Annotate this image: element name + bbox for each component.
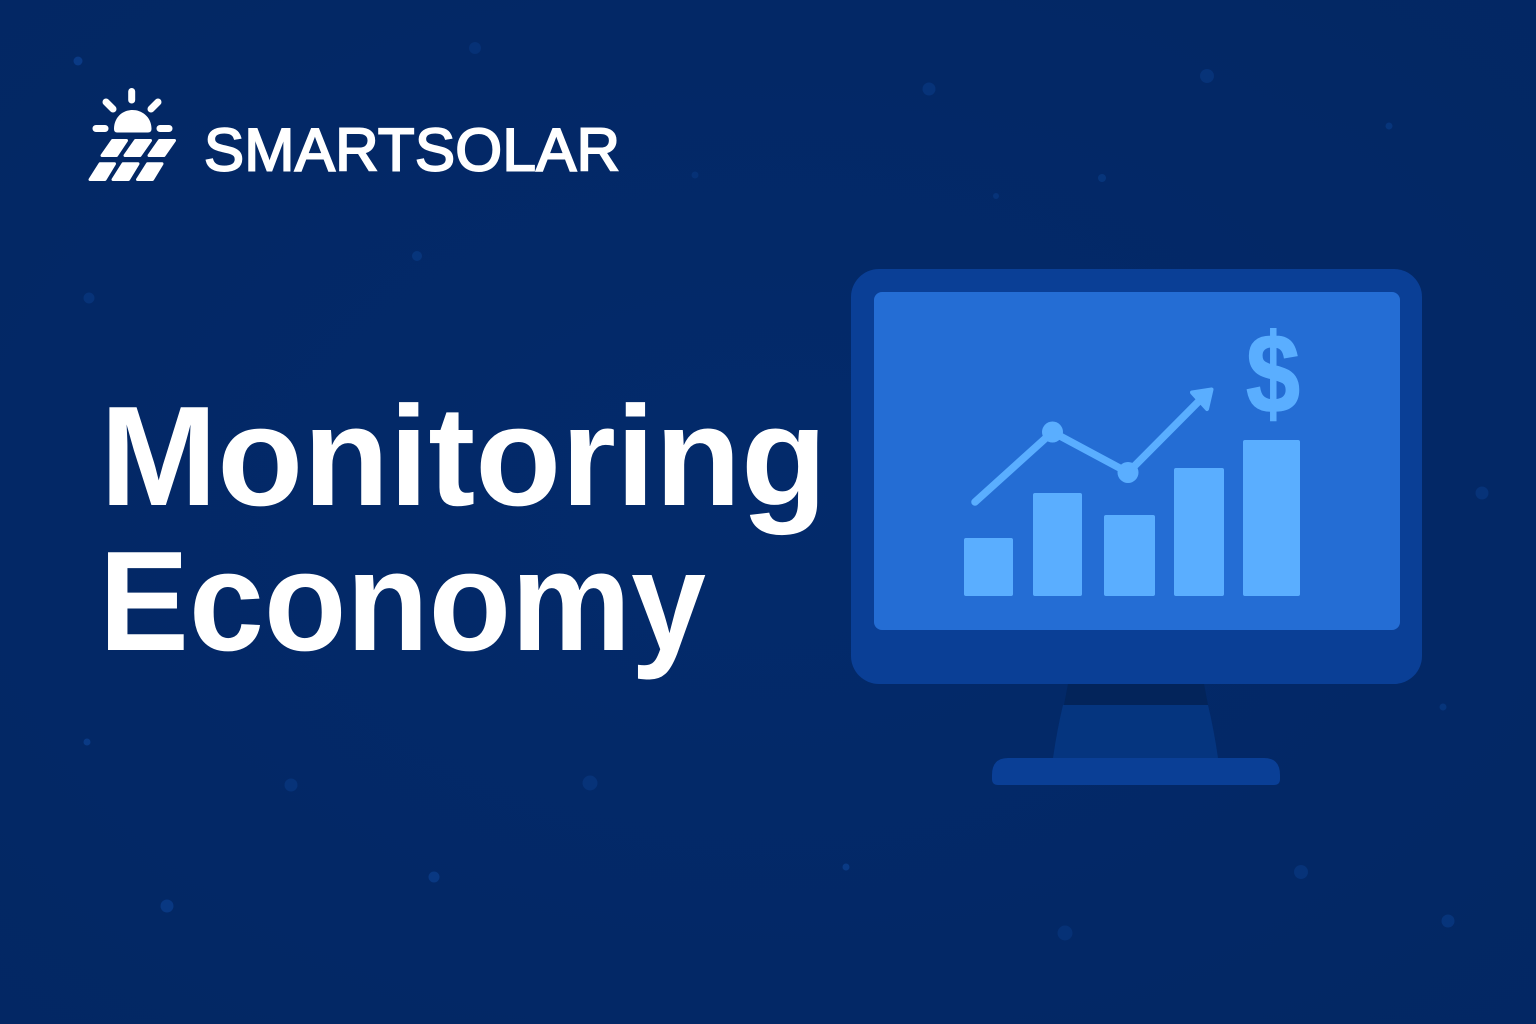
bar chart xyxy=(964,440,1300,596)
title: Monitoring xyxy=(100,377,827,536)
monitor screen xyxy=(874,292,1400,630)
icon: computer monitor xyxy=(851,269,1422,785)
monitor bezel xyxy=(851,269,1422,684)
monitor neck shadow xyxy=(1064,684,1208,705)
brand name: SMARTSOLAR xyxy=(204,116,620,184)
trend line arrow xyxy=(975,390,1212,502)
title: Economy xyxy=(99,522,706,681)
logo xyxy=(90,92,620,184)
monitor stand xyxy=(1053,705,1218,758)
monitor base xyxy=(992,758,1280,785)
icon: sun over solar panel xyxy=(90,92,174,180)
title xyxy=(99,377,827,681)
icon: dollar sign: $ xyxy=(1246,311,1300,437)
